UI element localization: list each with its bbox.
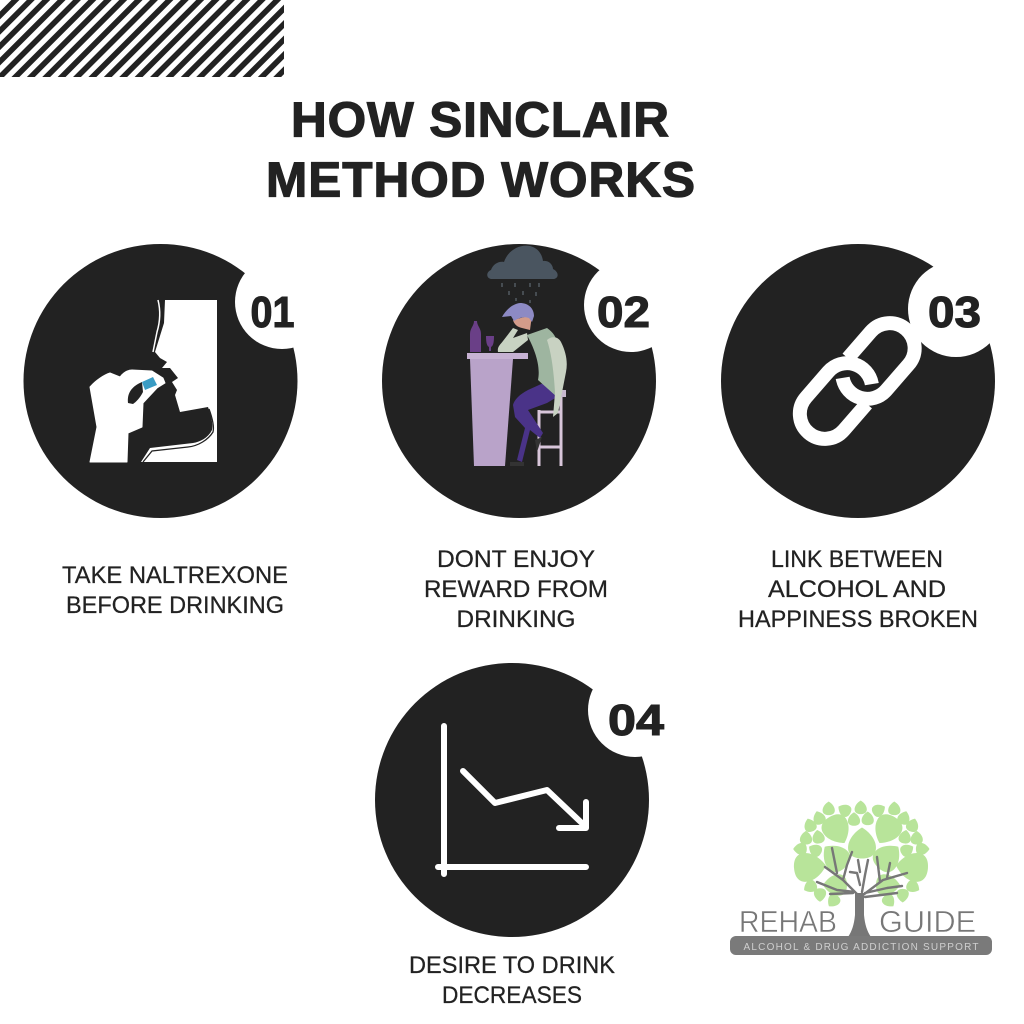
logo tree foliage <box>793 800 930 910</box>
decorative striped block <box>0 0 284 77</box>
panel: step 3 <box>721 244 1004 633</box>
stool <box>539 395 561 466</box>
step 1 circle <box>24 244 298 518</box>
icon: chain link <box>790 313 925 449</box>
panel: step 4 <box>375 663 682 1009</box>
step 2 caption: DRINKING <box>456 606 576 633</box>
panel: step 2 <box>382 244 678 633</box>
icon: rain cloud <box>487 246 558 303</box>
step 1 caption: BEFORE DRINKING <box>66 592 284 619</box>
step 1 caption <box>62 562 288 619</box>
step 4 caption: DECREASES <box>442 982 582 1009</box>
logo tagline bar: ALCOHOL & DRUG ADDICTION SUPPORT <box>744 942 978 953</box>
logo wordmark: REHAB <box>739 904 837 939</box>
logo tagline bar <box>730 936 992 955</box>
step 4 circle <box>375 663 649 937</box>
icon: declining line chart <box>438 726 586 874</box>
step 3 circle <box>721 244 995 518</box>
step 1 caption: TAKE NALTREXONE <box>62 562 288 589</box>
step 2 caption: DONT ENJOY <box>437 546 595 573</box>
step 2 number badge: 02 <box>597 288 650 337</box>
title: HOW SINCLAIR <box>291 92 669 148</box>
step 1 number badge: 01 <box>250 288 294 337</box>
head <box>513 315 532 330</box>
bottle and glass <box>470 321 494 352</box>
torso <box>527 328 558 397</box>
icon: person taking a pill <box>90 300 217 462</box>
panel: step 1 <box>24 244 329 619</box>
step 3 number badge <box>908 261 1004 357</box>
step 2 caption <box>424 546 608 633</box>
title <box>266 92 695 208</box>
step 4 number badge: 04 <box>608 696 665 745</box>
step 2 number badge <box>584 258 678 352</box>
step 1 number badge <box>235 255 329 349</box>
step 2 caption: REWARD FROM <box>424 576 608 603</box>
step 3 number badge: 03 <box>928 288 981 337</box>
logo wordmark <box>739 904 976 939</box>
title: METHOD WORKS <box>266 152 695 208</box>
logo tree trunk and branches <box>817 848 907 937</box>
step 3 caption: LINK BETWEEN <box>771 546 943 573</box>
logo wordmark: GUIDE <box>879 904 976 939</box>
step 2 circle <box>382 244 656 518</box>
step 3 caption: ALCOHOL AND <box>768 576 946 603</box>
logo: Rehab Guide <box>730 800 992 955</box>
step 3 caption: HAPPINESS BROKEN <box>738 606 978 633</box>
step 4 caption: DESIRE TO DRINK <box>409 952 616 979</box>
icon: man slumped at bar <box>467 303 567 466</box>
step 3 caption <box>738 546 978 633</box>
arms <box>547 337 567 417</box>
step 4 number badge <box>588 663 682 757</box>
step 4 caption <box>409 952 616 1009</box>
legs <box>513 380 557 462</box>
